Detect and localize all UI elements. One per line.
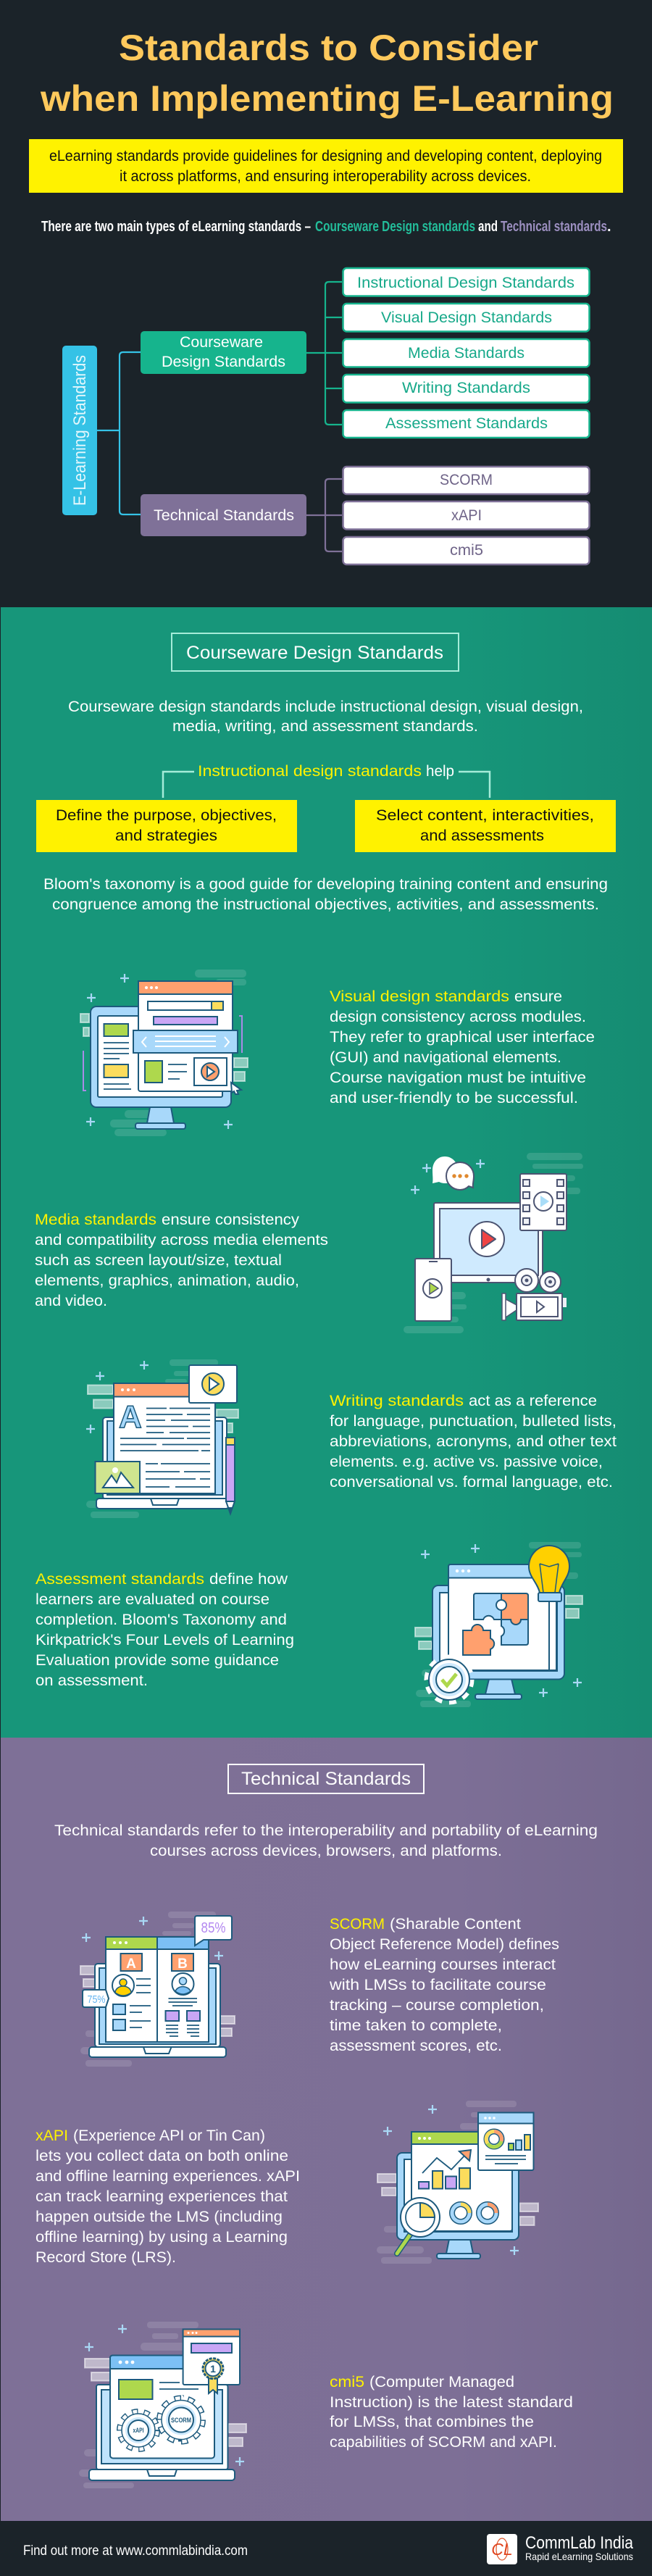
node: SCORM (343, 467, 590, 494)
chart: standards tree (62, 268, 590, 564)
text: SCORM: how eLearning courses interact (330, 1956, 556, 1973)
text: intro (68, 698, 583, 735)
node: technical: Technical Standards (154, 507, 294, 524)
text: intro: Technical standards refer to the interoperability and portability of eLearning (54, 1822, 598, 1839)
text: website: Find out more at www.commlabindia.com (23, 2543, 248, 2559)
text: assessment standards (35, 1570, 294, 1689)
icon: A/B laptop: B (177, 1956, 188, 1972)
heading: Courseware Design Standards (186, 643, 443, 663)
text: visual design standards: Course navigation must be intuitive (330, 1069, 586, 1086)
text: media standards: elements, graphics, animation, audio, (35, 1272, 299, 1289)
subheading: instructional design bracket: help (426, 762, 454, 780)
text: visual design standards: Visual design standards (330, 988, 509, 1005)
text: two main types: There are two main types of eLearning standards – (41, 219, 311, 235)
text: cmi5: for LMSs, that combines the (330, 2413, 534, 2430)
text: xAPI: offline learning) by using a Learning (35, 2228, 288, 2246)
icon: writing document: A (119, 1399, 142, 1435)
text: xAPI: (Experience API or Tin Can) (73, 2127, 265, 2144)
text: media standards: and compatibility across media elements (35, 1231, 328, 1249)
text: assessment standards: Evaluation provide some guidance (35, 1651, 279, 1669)
icon: analytics monitor (377, 2101, 538, 2264)
text: intro: courses across devices, browsers, and platforms. (150, 1842, 502, 1859)
text: SCORM: (Sharable Content (390, 1915, 521, 1933)
root node: E-Learning Standards (70, 355, 90, 506)
title: Standards to Consider (119, 28, 538, 68)
icon: puzzle and bulb (415, 1542, 582, 1707)
node: visual design: Visual Design Standards (381, 309, 552, 326)
heading: Technical Standards (241, 1769, 411, 1789)
icon: A/B laptop: 75% (87, 1993, 106, 2006)
connector: root (97, 352, 141, 514)
text: two main types (41, 219, 611, 235)
text: intro (54, 1822, 598, 1859)
icon: gears laptop: SCORM (171, 2417, 191, 2424)
panel: technical standards (1, 1738, 652, 2521)
heading (172, 633, 459, 671)
icon: media devices (404, 1153, 583, 1333)
node: instructional design (343, 268, 590, 296)
text: xAPI: and offline learning experiences. xAPI (35, 2167, 300, 2185)
text: media standards: ensure consistency (162, 1211, 299, 1228)
panel: header (0, 0, 652, 607)
connector: courseware branches (306, 282, 342, 425)
callout: content (355, 800, 616, 852)
text: bloom: congruence among the instructional objectives, activities, and assessments. (52, 896, 599, 913)
text: intro: media, writing, and assessment standards. (172, 717, 478, 735)
title (40, 28, 614, 119)
icon: visual design monitor (80, 970, 248, 1136)
node: xAPI (343, 501, 590, 529)
node: writing: Writing Standards (402, 380, 530, 396)
text: writing standards: for language, punctuation, bulleted lists, (330, 1412, 617, 1430)
text: assessment standards: learners are evaluated on course (35, 1591, 269, 1608)
root node (62, 346, 97, 515)
text: xAPI: xAPI (35, 2127, 68, 2144)
node: cmi5: cmi5 (450, 542, 483, 559)
node: visual design (343, 304, 590, 332)
text: SCORM: with LMSs to facilitate course (329, 1976, 546, 1993)
callout: purpose (36, 800, 297, 852)
text: cmi5: (Computer Managed (369, 2373, 514, 2390)
callout: purpose: Define the purpose, objectives, (56, 806, 277, 824)
icon: gears laptop: xAPI (133, 2427, 143, 2434)
text: SCORM: assessment scores, etc. (330, 2037, 502, 2054)
text: writing standards: elements. e.g. active vs. passive voice, (330, 1453, 603, 1470)
text: assessment standards: Kirkpatrick's Four Levels of Learning (35, 1631, 294, 1648)
callout: definition: eLearning standards provide guidelines for designing and developing content, deploying (49, 147, 602, 164)
node: media (343, 339, 590, 367)
text: visual design standards: design consistency across modules. (330, 1008, 586, 1025)
text: writing standards: act as a reference (469, 1392, 597, 1409)
text: brand: Rapid eLearning Solutions (525, 2551, 633, 2562)
callout: definition: it across platforms, and ensuring interoperability across devices. (120, 167, 531, 185)
text: brand: CommLab India (525, 2533, 634, 2553)
icon: logo: CL (491, 2540, 513, 2559)
text: cmi5: Instruction) is the latest standard (330, 2393, 573, 2411)
icon: gears laptop: 1 (210, 2363, 216, 2375)
text: media standards (35, 1211, 328, 1309)
text: visual design standards: They refer to graphical user interface (330, 1028, 595, 1046)
text: SCORM: Object Reference Model) defines (330, 1935, 559, 1953)
callout: definition (29, 139, 623, 193)
text: xAPI: happen outside the LMS (including (35, 2208, 283, 2225)
text: SCORM: time taken to complete, (330, 2017, 502, 2034)
node: courseware (141, 331, 306, 374)
text: visual design standards: ensure (514, 988, 562, 1005)
text: visual design standards: (GUI) and navigational elements. (330, 1049, 561, 1066)
text: assessment standards: define how (209, 1570, 288, 1588)
node: assessment: Assessment Standards (385, 415, 548, 432)
icon: A/B laptop (80, 1912, 235, 2067)
node: courseware: Design Standards (162, 354, 285, 370)
text: media standards: Media standards (35, 1211, 156, 1228)
node: assessment (343, 410, 590, 438)
text: cmi5 (330, 2373, 573, 2451)
text: media standards: and video. (35, 1292, 107, 1309)
connector: technical branches (306, 479, 342, 551)
icon: gears laptop (79, 2322, 246, 2488)
text: writing standards (330, 1392, 617, 1491)
node: cmi5 (343, 537, 590, 564)
text: xAPI (35, 2127, 300, 2266)
node: SCORM: SCORM (440, 472, 493, 488)
node: courseware: Courseware (180, 334, 263, 351)
text: bloom (43, 875, 608, 913)
callout: content: Select content, interactivities, (376, 806, 594, 824)
icon: writing document (86, 1359, 238, 1518)
text: SCORM: SCORM (330, 1915, 385, 1933)
heading (228, 1764, 424, 1793)
text: visual design standards: and user-friendly to be successful. (330, 1089, 578, 1106)
node: xAPI: xAPI (451, 507, 482, 524)
callout: content: and assessments (420, 827, 544, 844)
icon: A/B laptop: A (126, 1956, 136, 1972)
text: assessment standards: Assessment standards (35, 1570, 204, 1588)
text: SCORM: tracking – course completion, (330, 1996, 544, 2014)
node: writing (343, 375, 590, 403)
text: cmi5: capabilities of SCORM and xAPI. (330, 2433, 557, 2451)
text: SCORM (329, 1915, 559, 2054)
icon: logo (487, 2534, 517, 2564)
node: instructional design: Instructional Design Standards (357, 275, 574, 291)
text: xAPI: Record Store (LRS). (35, 2248, 176, 2266)
text: bloom: Bloom's taxonomy is a good guide for developing training content and ensuring (43, 875, 608, 893)
text: two main types: . (607, 219, 611, 235)
text: intro: Courseware design standards include instructional design, visual design, (68, 698, 583, 715)
text: two main types: Courseware Design standards (315, 219, 475, 235)
text: writing standards: conversational vs. formal language, etc. (330, 1473, 613, 1491)
text: brand (525, 2533, 634, 2562)
text: cmi5: cmi5 (330, 2373, 364, 2390)
text: media standards: such as screen layout/size, textual (35, 1251, 282, 1269)
text: writing standards: Writing standards (330, 1392, 464, 1409)
text: assessment standards: completion. Bloom's Taxonomy and (35, 1611, 287, 1628)
subheading: instructional design bracket (163, 762, 490, 798)
subheading: instructional design bracket: Instructional design standards (198, 762, 422, 780)
footer (0, 2521, 652, 2576)
icon: A/B laptop: 85% (201, 1920, 226, 1936)
callout: purpose: and strategies (115, 827, 217, 844)
text: xAPI: lets you collect data on both online (35, 2147, 288, 2164)
text: xAPI: can track learning experiences that (35, 2188, 288, 2205)
text: visual design standards (330, 988, 595, 1106)
title: when Implementing E-Learning (40, 78, 614, 119)
text: assessment standards: on assessment. (35, 1672, 148, 1689)
text: two main types: and (478, 219, 498, 235)
node: media: Media Standards (408, 345, 524, 362)
panel: courseware design standards (1, 607, 652, 1738)
text: writing standards: abbreviations, acronyms, and other text (330, 1433, 617, 1450)
text: two main types: Technical standards (501, 219, 607, 235)
node: technical (141, 494, 306, 536)
